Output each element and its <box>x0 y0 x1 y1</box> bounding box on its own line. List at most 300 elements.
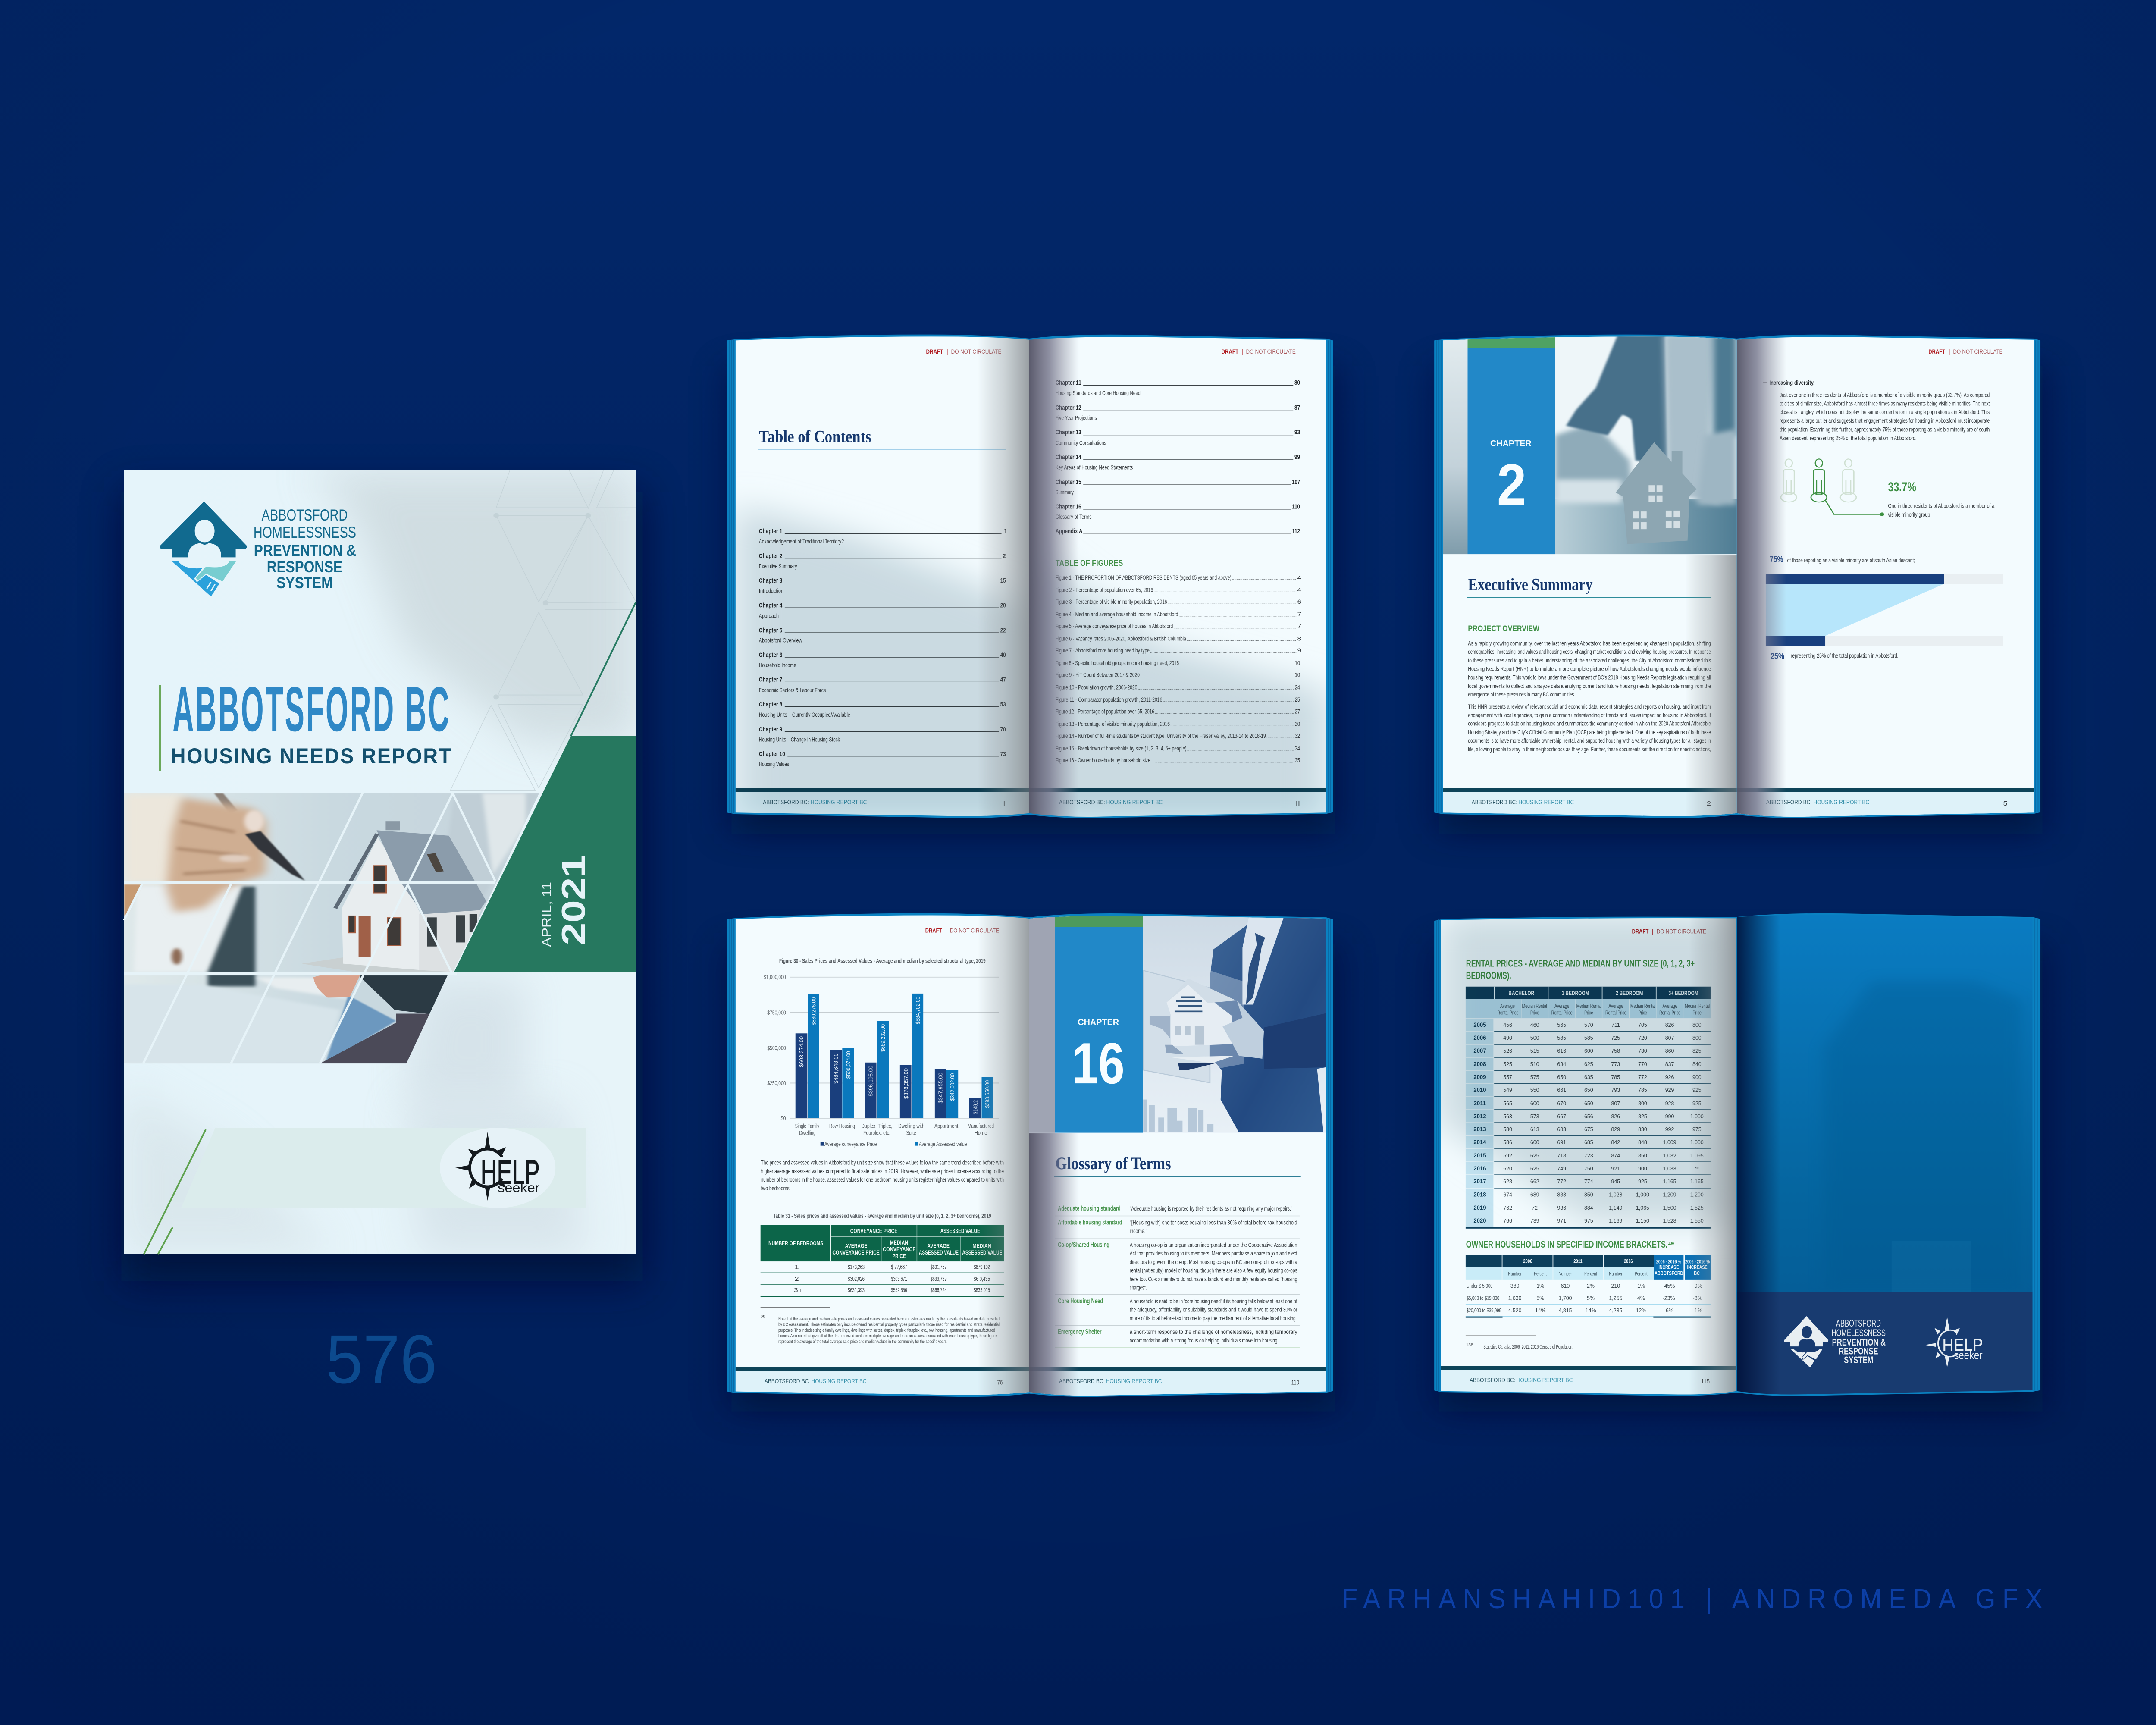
table: owner households by income bracket: 1% <box>1536 1283 1544 1289</box>
contents list chapters 1-10: Housing Units – Change in Housing Stock <box>759 737 840 743</box>
table of figures heading: TABLE OF FIGURES <box>1056 558 1123 568</box>
logo text: organisation name: PREVENTION & <box>1832 1337 1886 1348</box>
table: rental prices by year: 842 <box>1611 1139 1620 1145</box>
contents list chapters 1-10: Abbotsford Overview <box>759 637 802 644</box>
bar chart: sales prices and assessed values: Fourplex, etc. <box>863 1130 890 1136</box>
table: rental prices by year: 526 <box>1503 1048 1512 1054</box>
table of figures list: 7 <box>1297 623 1301 630</box>
table: rental prices by year: 826 <box>1611 1113 1620 1120</box>
table: rental prices by year: 921 <box>1611 1165 1620 1172</box>
table: rental prices by year: 2014 <box>1473 1139 1486 1145</box>
page footer: ABBOTSFORD BC: <box>765 1377 810 1385</box>
draft stamp: DRAFT <box>1632 928 1649 935</box>
contents list chapters 11-16: 99 <box>1294 453 1300 461</box>
table: rental prices by year: BACHELOR <box>1508 990 1535 997</box>
table: rental prices by year: 926 <box>1665 1074 1674 1080</box>
body text: demographics, increasing land values and housing costs, changing market conditions, and evolving housing pressures. In response <box>1468 649 1711 656</box>
table: rental prices by year: 625 <box>1530 1152 1539 1159</box>
table: rental prices by year: 2005 <box>1473 1022 1486 1028</box>
table: rental prices by year: 616 <box>1557 1048 1566 1054</box>
chapter photo: businessman holding model house <box>1029 912 1327 1133</box>
table: rental prices by year: 829 <box>1611 1126 1620 1132</box>
body text: increasing diversity: Asian descent; representing 25% of the total population in Abbotsford. <box>1780 435 1917 442</box>
panel: rental tables page and back cover <box>1434 912 2043 1411</box>
contents list chapters 1-10: 53 <box>1000 701 1006 708</box>
contents list chapters 1-10: Acknowledgement of Traditional Territory? <box>759 539 844 545</box>
table: rental prices by year: 685 <box>1584 1139 1593 1145</box>
body text: documents is to have more affordable ownership, rental, and supported housing with a variety of housing types for all stages in <box>1468 738 1711 744</box>
page footer: 5 <box>2003 800 2008 807</box>
watermark credit: FARHANSHAHID101 | ANDROMEDA GFX <box>1342 1584 2043 1614</box>
contents list chapters 1-10: 22 <box>1000 627 1006 634</box>
table: rental prices by year: 772 <box>1638 1074 1647 1080</box>
contents list chapters 1-10: Economic Sectors & Labour Force <box>759 687 826 693</box>
table: rental prices by year: 1 BEDROOM <box>1562 990 1589 997</box>
left page <box>1439 915 1737 1399</box>
logo: Help Seeker white: seeker <box>1954 1349 1983 1362</box>
table: owner households by income bracket: 1,700 <box>1559 1295 1572 1302</box>
table: owner households by income bracket: ABBOTSFORD <box>1655 1270 1683 1276</box>
table of figures list <box>1056 574 1301 764</box>
chart: 75% and 25% proportion bars: 25% <box>1771 651 1784 661</box>
contents list chapters 1-10: 1 <box>1003 527 1008 535</box>
table: owner households by income bracket: -9% <box>1693 1283 1702 1289</box>
cover photo: hand with pen and model house <box>124 793 542 1064</box>
table: owner households by income bracket: 12% <box>1636 1307 1646 1314</box>
body text: emergence of these pressures in many BC communities. <box>1468 692 1575 698</box>
chart: 75% and 25% proportion bars: of those reporting as a visible minority are of south Asian descent; <box>1787 558 1915 564</box>
bar chart: sales prices and assessed values: $484,648.00 <box>833 1053 840 1084</box>
contents list chapters 11-16: 110 <box>1292 503 1300 510</box>
table: rental prices by year: 2008 <box>1473 1060 1486 1067</box>
table of figures list: Figure 11 - Comparator population growth, 2011-2016 <box>1056 696 1163 703</box>
page footer <box>1766 799 2008 807</box>
table: rental prices by year: 620 <box>1503 1165 1512 1172</box>
table: owner households by income bracket: Number <box>1609 1271 1623 1276</box>
table: sale prices and assessed values: 1 <box>795 1264 799 1270</box>
glossary terms <box>1055 1204 1300 1348</box>
glossary terms: charges". <box>1130 1285 1147 1291</box>
page footer <box>1059 799 1300 807</box>
table: rental prices by year: 1,095 <box>1690 1152 1704 1159</box>
table: rental prices by year: 785 <box>1611 1074 1620 1080</box>
bar chart: sales prices and assessed values: $293,650.00 <box>984 1080 990 1108</box>
table: rental prices by year: 900 <box>1638 1165 1647 1172</box>
table: owner households by income bracket: -8% <box>1693 1295 1702 1302</box>
panel: table of contents spread <box>727 334 1335 834</box>
table of figures list: 25 <box>1295 696 1300 703</box>
body text: to these pressures and to gain a better understanding of the associated challenges, the City of Abbotsford commissioned this <box>1468 657 1711 664</box>
table: rental prices by year: 1,065 <box>1636 1204 1649 1211</box>
page footer <box>1470 1377 1710 1385</box>
body text: increasing diversity <box>1763 380 1990 442</box>
table: sale prices and assessed values: CONVEYANCE PRICE <box>832 1249 880 1256</box>
table of figures list: 24 <box>1295 684 1300 691</box>
table: rental prices by year: 850 <box>1584 1191 1593 1198</box>
table: rental prices by year: 837 <box>1665 1060 1674 1067</box>
table: owner households by income bracket: 4,235 <box>1609 1307 1622 1314</box>
table: rental prices by year: 1,000 <box>1636 1191 1649 1198</box>
glossary terms: Co-op/Shared Housing <box>1058 1241 1109 1248</box>
contents list chapters 1-10: Chapter 8 <box>759 701 782 708</box>
table: sale prices and assessed values: $833,015 <box>974 1287 990 1294</box>
contents list chapters 1-10: Introduction <box>759 588 783 594</box>
table: rental prices by year: 500 <box>1530 1035 1539 1041</box>
table: rental prices by year: 1,150 <box>1636 1217 1649 1224</box>
table: rental prices by year: 515 <box>1530 1048 1539 1054</box>
table: rental prices by year: 563 <box>1503 1113 1512 1120</box>
table of figures list: 8 <box>1297 636 1301 642</box>
subheading: PROJECT OVERVIEW <box>1468 624 1540 633</box>
table: rental prices by year: 460 <box>1530 1022 1539 1028</box>
page footer: 115 <box>1701 1378 1710 1385</box>
draft stamp: | <box>945 928 947 934</box>
table: rental prices by year: 718 <box>1557 1152 1566 1159</box>
table: rental prices by year: 662 <box>1530 1178 1539 1185</box>
table: rental prices by year: 711 <box>1611 1022 1620 1028</box>
table: owner households by income bracket: Percent <box>1635 1271 1648 1276</box>
page footer: ABBOTSFORD BC: <box>1059 1377 1105 1385</box>
table: rental prices by year: 1,165 <box>1690 1178 1704 1185</box>
body text <box>1468 640 1711 753</box>
table: rental prices by year: 635 <box>1584 1074 1593 1080</box>
panel: chart and glossary spread <box>727 912 1335 1411</box>
body text <box>761 1160 1004 1192</box>
table: rental prices by year: 800 <box>1692 1022 1702 1028</box>
table: owner households by income bracket: Percent <box>1534 1271 1547 1276</box>
section heading: Glossary of Terms <box>1056 1154 1171 1173</box>
draft stamp <box>925 928 999 934</box>
contents list chapters 11-16: Five Year Projections <box>1056 415 1097 421</box>
table: sale prices and assessed values: $302,026 <box>848 1276 865 1282</box>
table: rental prices by year: 874 <box>1611 1152 1620 1159</box>
table: rental prices by year: 800 <box>1638 1100 1647 1107</box>
table: rental prices by year: Average <box>1554 1003 1569 1009</box>
page footer: HOUSING REPORT BC <box>1517 1377 1573 1384</box>
table: rental prices by year: 945 <box>1611 1178 1620 1185</box>
bar chart: sales prices and assessed values: Dwelling with <box>898 1123 924 1129</box>
footnote: 138 <box>1466 1343 1473 1347</box>
contents list chapters 1-10: 70 <box>1000 726 1006 733</box>
table: rental prices by year: 2010 <box>1473 1087 1486 1093</box>
chart: 75% and 25% proportion bars: 75% <box>1770 555 1783 564</box>
contents list chapters 1-10: Chapter 3 <box>759 577 782 584</box>
table of figures list: 35 <box>1295 757 1300 764</box>
sponsor band <box>181 1128 586 1208</box>
table: rental prices by year: 650 <box>1584 1100 1593 1107</box>
green date panel <box>454 602 636 972</box>
table: rental prices by year: 971 <box>1557 1217 1566 1224</box>
date text <box>539 855 592 947</box>
glossary terms: Act that provides housing to its members. Members purchase a share to join and elect <box>1130 1251 1297 1257</box>
table: rental prices by year: 580 <box>1503 1126 1512 1132</box>
table: owner households by income bracket: $20,000 to $39,999 <box>1467 1308 1501 1314</box>
table: sale prices and assessed values: ASSESSED VALUE <box>919 1249 959 1256</box>
table: rental prices by year: Rental Price <box>1605 1010 1626 1016</box>
table of figures list: Figure 13 - Percentage of visible minority population, 2016 <box>1056 721 1170 728</box>
draft stamp: DRAFT <box>925 928 942 934</box>
table of figures list: Figure 1 - THE PROPORTION OF ABBOTSFORD RESIDENTS (aged 65 years and above) <box>1056 574 1232 581</box>
table: rental prices by year: 825 <box>1638 1113 1647 1120</box>
table: sale prices and assessed values: ASSESSED VALUE <box>962 1249 1002 1256</box>
table: rental prices by year: 1,032 <box>1663 1152 1676 1159</box>
contents list chapters 11-16: 107 <box>1292 478 1300 486</box>
body text: number of bedrooms in the house, assessed values for one-bedroom housing units register higher values compared to units with <box>761 1177 1004 1183</box>
bar chart: sales prices and assessed values: Appartment <box>934 1123 959 1129</box>
table: rental prices by year: 2017 <box>1473 1178 1486 1185</box>
table: rental prices by year: 758 <box>1611 1048 1620 1054</box>
contents list chapters 1-10: Chapter 9 <box>759 726 782 733</box>
logo text: organisation name: HOMELESSNESS <box>254 524 356 541</box>
table: rental prices by year: 2007 <box>1473 1048 1486 1054</box>
footnote: purposes. This includes single family dwellings, dwellings with suites, duplex, triplex, fourplex, etc., row housing, apartments and manufactured <box>778 1327 995 1333</box>
body text: two bedrooms. <box>761 1186 791 1192</box>
table: rental prices by year: 565 <box>1503 1100 1512 1107</box>
table: rental prices by year: 725 <box>1611 1035 1620 1041</box>
table: rental prices by year: 1,165 <box>1663 1178 1676 1185</box>
table: rental prices by year: Median Rental <box>1630 1003 1655 1009</box>
left page <box>736 912 1029 1399</box>
contents list chapters 11-16: Housing Standards and Core Housing Need <box>1056 390 1141 397</box>
draft stamp: DO NOT CIRCULATE <box>951 349 1002 355</box>
table: owner households by income bracket: -45% <box>1663 1283 1675 1289</box>
table: owner households by income bracket: 4% <box>1637 1295 1645 1302</box>
logo text: organisation name: RESPONSE <box>1839 1346 1878 1357</box>
draft stamp <box>1222 349 1296 355</box>
page footer: ABBOTSFORD BC: <box>1059 799 1105 806</box>
table: rental prices by year: Rental Price <box>1551 1010 1573 1016</box>
page footer: II <box>1296 800 1300 807</box>
table: rental prices by year: 720 <box>1638 1035 1647 1041</box>
page heading: Table of Contents <box>759 427 871 446</box>
table: sale prices and assessed values: NUMBER OF BEDROOMS <box>768 1240 823 1247</box>
bar chart: sales prices and assessed values: $500,000 <box>767 1045 786 1051</box>
table: rental prices by year: 2013 <box>1473 1126 1486 1132</box>
table: rental prices by year: 2020 <box>1473 1217 1486 1224</box>
draft stamp: | <box>1241 349 1243 355</box>
contents list chapters 1-10: Executive Summary <box>759 563 797 570</box>
green accent lines <box>144 1129 206 1254</box>
table: rental prices by year: 749 <box>1557 1165 1566 1172</box>
draft stamp <box>1632 928 1706 935</box>
table: rental prices by year: 975 <box>1692 1126 1702 1132</box>
logo text: organisation name: ABBOTSFORD <box>1836 1318 1881 1329</box>
table: owner households by income bracket: Under $ 5,000 <box>1467 1283 1492 1289</box>
page footer: HOUSING REPORT BC <box>1106 799 1163 806</box>
glossary terms: "Adequate housing is reported by their residents as not requiring any major repairs." <box>1130 1206 1292 1212</box>
right page <box>1737 334 2034 821</box>
callout: 33.7%: 33.7% <box>1888 480 1916 494</box>
table: rental prices by year: 900 <box>1692 1074 1702 1080</box>
contents list chapters 1-10: Chapter 2 <box>759 552 782 559</box>
table: rental prices by year: 585 <box>1557 1035 1566 1041</box>
table: rental prices by year: 625 <box>1530 1165 1539 1172</box>
table: rental prices by year: 510 <box>1530 1060 1539 1067</box>
contents list chapters 1-10: 73 <box>1000 750 1006 758</box>
table: rental prices by year: ** <box>1695 1165 1699 1172</box>
body text: local governments to collect and analyze data identifying current and future housing needs, legislation stemming from the <box>1468 683 1711 690</box>
draft stamp <box>1928 349 2003 355</box>
contents list chapters 1-10: 2 <box>1003 552 1006 559</box>
table: rental prices by year: 2016 <box>1473 1165 1486 1172</box>
bar chart: sales prices and assessed values: $500,074.00 <box>846 1051 852 1079</box>
glossary terms: Emergency Shelter <box>1058 1328 1102 1336</box>
contents list chapters 11-16: Community Consultations <box>1056 440 1106 446</box>
draft stamp: DRAFT <box>1222 349 1238 355</box>
table: rental prices by year: 1,000 <box>1690 1113 1704 1120</box>
bar chart: sales prices and assessed values: Dwelling <box>799 1130 816 1136</box>
table: rental prices by year: 650 <box>1584 1087 1593 1093</box>
table: rental prices by year: 675 <box>1584 1126 1593 1132</box>
table: owner households by income bracket: 210 <box>1611 1283 1620 1289</box>
table: owner households by income bracket: 1,255 <box>1609 1295 1622 1302</box>
contents list chapters 11-16: Chapter 15 <box>1056 478 1081 486</box>
table: rental prices by year: 613 <box>1530 1126 1539 1132</box>
footnote <box>761 1307 1000 1344</box>
bar chart: sales prices and assessed values: $250,000 <box>767 1080 786 1086</box>
body text: Housing Strategy and the City's Official Community Plan (OCP) are being implemented. One of the key aspirations of both these <box>1468 729 1711 736</box>
contents list chapters 11-16: Appendix A <box>1056 527 1082 535</box>
table: rental prices by year: 1,500 <box>1663 1204 1676 1211</box>
page footer: ABBOTSFORD BC: <box>1470 1377 1515 1384</box>
contents list chapters 1-10: 20 <box>1000 602 1006 609</box>
table: rental prices by year: 1,009 <box>1663 1139 1676 1145</box>
chapter number panel <box>1467 334 1555 554</box>
draft stamp: DO NOT CIRCULATE <box>1246 349 1296 355</box>
table of figures list: 9 <box>1297 648 1301 654</box>
draft stamp: DO NOT CIRCULATE <box>1657 928 1706 935</box>
callout: 33.7%: One in three residents of Abbotsford is a member of a <box>1888 503 1994 509</box>
table of figures list: 4 <box>1297 587 1301 593</box>
chart caption: Figure 30 - Sales Prices and Assessed Values - Average and median by selected structural type, 2019 <box>779 958 986 964</box>
page footer: ABBOTSFORD BC: <box>1766 799 1812 806</box>
table: owner households by income bracket: Percent <box>1584 1271 1597 1276</box>
table: sale prices and assessed values: $303,671 <box>891 1276 907 1282</box>
table: sale prices and assessed values: ASSESSED VALUE <box>940 1228 980 1235</box>
draft stamp: | <box>1948 349 1950 355</box>
bar chart: sales prices and assessed values: $396,195.00 <box>868 1066 874 1096</box>
table of figures list: Figure 10 - Population growth, 2006-2020 <box>1056 684 1138 691</box>
table: rental prices by year: 650 <box>1557 1074 1566 1080</box>
table: rental prices by year: 807 <box>1665 1035 1674 1041</box>
table: rental prices by year: 661 <box>1557 1087 1566 1093</box>
contents list chapters 11-16: 80 <box>1294 379 1300 386</box>
chart: 75% and 25% proportion bars <box>1766 555 2003 661</box>
footnote: Statistics Canada, 2006, 2011, 2016 Census of Population. <box>1483 1343 1573 1349</box>
footnote: homes. Also note that given that the data received contains multiple average and median values associated with each housing type, these figures <box>778 1333 998 1339</box>
table of figures list: Figure 16 - Owner households by household size <box>1056 757 1150 764</box>
contents list chapters 1-10: Housing Units – Currently Occupied/Available <box>759 712 850 718</box>
table of figures list: Figure 14 - Number of full-time students by student type, University of the Fraser Valley, 2013-14 to 2018-19 <box>1056 733 1266 740</box>
table: rental prices by year: 750 <box>1584 1165 1593 1172</box>
body text: Housing Needs Report (HNR) to formulate a more complete picture of how Abbotsford's changing needs would influence <box>1468 666 1711 672</box>
body text: engagement with local agencies, to gain a common understanding of trends and issues impacting housing in Abbotsford. It <box>1468 712 1711 718</box>
footnote <box>1466 1336 1573 1349</box>
table of figures list: 27 <box>1295 709 1300 715</box>
table: rental prices by year: 925 <box>1692 1087 1702 1093</box>
contents list chapters 1-10: Chapter 4 <box>759 602 783 609</box>
heading: owner households: OWNER HOUSEHOLDS IN SPECIFIED INCOME BRACKETS. <box>1466 1239 1668 1250</box>
bar chart: sales prices and assessed values: Suite <box>906 1130 916 1136</box>
table: rental prices by year: 72 <box>1532 1204 1538 1211</box>
panel: back cover <box>1737 912 2034 1399</box>
table: owner households by income bracket: 4,520 <box>1508 1307 1522 1314</box>
callout: 33.7%: visible minority group <box>1888 511 1930 518</box>
contents list chapters 1-10: 47 <box>1000 676 1006 683</box>
table: rental prices by year: 689 <box>1530 1191 1539 1198</box>
contents list chapters 1-10: Chapter 5 <box>759 627 782 634</box>
table: rental prices by year: Rental Price <box>1498 1010 1518 1016</box>
table: rental prices by year: 772 <box>1557 1178 1566 1185</box>
table: sale prices and assessed values: AVERAGE <box>845 1243 867 1249</box>
table: rental prices by year: Price <box>1530 1010 1539 1016</box>
table: sale prices and assessed values: $679,192 <box>974 1264 990 1270</box>
glossary terms: directors to govern the co-op. Most housing co-ops in BC are non-profit co-ops with a <box>1130 1259 1297 1265</box>
logo: Help Seeker: HELP <box>481 1154 540 1192</box>
table: rental prices by year: 928 <box>1665 1100 1674 1107</box>
table: sale prices and assessed values: $691,757 <box>931 1264 946 1270</box>
page footer: HOUSING REPORT BC <box>1518 799 1574 806</box>
bar chart: sales prices and assessed values: Single Family <box>795 1123 819 1129</box>
table: rental prices by year: 770 <box>1638 1060 1647 1067</box>
table: rental prices by year: 785 <box>1638 1087 1647 1093</box>
table: sale prices and assessed values: $552,856 <box>891 1287 907 1294</box>
bar chart: sales prices and assessed values: $347,955.00 <box>937 1073 944 1103</box>
table: sale prices and assessed values: $173,263 <box>848 1264 865 1270</box>
panel: report front cover <box>121 470 643 1281</box>
table of figures list: Figure 12 - Percentage of population over 65, 2016 <box>1056 709 1154 715</box>
logo text: organisation name: SYSTEM <box>1844 1355 1873 1366</box>
table: owner households by income bracket: -1% <box>1693 1307 1702 1314</box>
table: sale prices and assessed values: 3+ <box>794 1287 802 1294</box>
table: owner households by income bracket: 2% <box>1587 1283 1595 1289</box>
chapter number panel <box>1055 912 1143 1133</box>
table: rental prices by year: 2018 <box>1473 1191 1486 1198</box>
table: rental prices by year: 1,200 <box>1690 1191 1704 1198</box>
table: owner households by income bracket: 14% <box>1586 1307 1596 1314</box>
table: rental prices by year: 730 <box>1638 1048 1647 1054</box>
page footer: HOUSING REPORT BC <box>812 1377 867 1385</box>
decorative triangle mesh <box>450 470 636 790</box>
table: owner households by income bracket: 2006 - 2016 % <box>1685 1259 1710 1264</box>
table: sale prices and assessed values <box>761 1225 1004 1297</box>
table of figures list: Figure 5 - Average conveyance price of houses in Abbotsford <box>1056 623 1173 630</box>
table: sale prices and assessed values: $866,724 <box>931 1287 947 1294</box>
table: rental prices by year: 774 <box>1584 1178 1593 1185</box>
table: rental prices by year: Average <box>1608 1003 1623 1009</box>
table: sale prices and assessed values: CONVEYANCE PRICE <box>850 1228 897 1235</box>
heading: owner households: 138 <box>1668 1241 1674 1246</box>
draft stamp: DO NOT CIRCULATE <box>1953 349 2003 355</box>
table: rental prices by year: 838 <box>1557 1191 1566 1198</box>
table: rental prices by year: 929 <box>1665 1087 1674 1093</box>
bar chart: sales prices and assessed values: $880,276.00 <box>811 997 817 1025</box>
right page <box>1029 334 1327 821</box>
body text: higher average assessed values compared to final sale prices in 2019. However, while sale prices increase according to the <box>761 1168 1004 1175</box>
icon: three people, one highlighted <box>1781 459 1884 516</box>
table of figures list: Figure 9 - PiT Count Between 2017 & 2020 <box>1056 672 1140 678</box>
table: rental prices by year: 550 <box>1530 1087 1539 1093</box>
bar chart: sales prices and assessed values: $148,2 <box>972 1100 979 1114</box>
contents list chapters 11-16: 93 <box>1294 429 1300 436</box>
table: owner households by income bracket: 2006 <box>1523 1258 1532 1264</box>
panel: report front cover: ABBOTSFORD BC <box>172 674 451 745</box>
table: rental prices by year: 628 <box>1503 1178 1512 1185</box>
table: rental prices by year: Price <box>1638 1010 1647 1016</box>
contents list chapters 11-16: Chapter 11 <box>1056 379 1081 386</box>
table: rental prices by year: 936 <box>1557 1204 1566 1211</box>
footnote: Note that the average and median sale prices and assessed values presented here are estimates made by the consultants based on data provided <box>778 1317 1000 1322</box>
